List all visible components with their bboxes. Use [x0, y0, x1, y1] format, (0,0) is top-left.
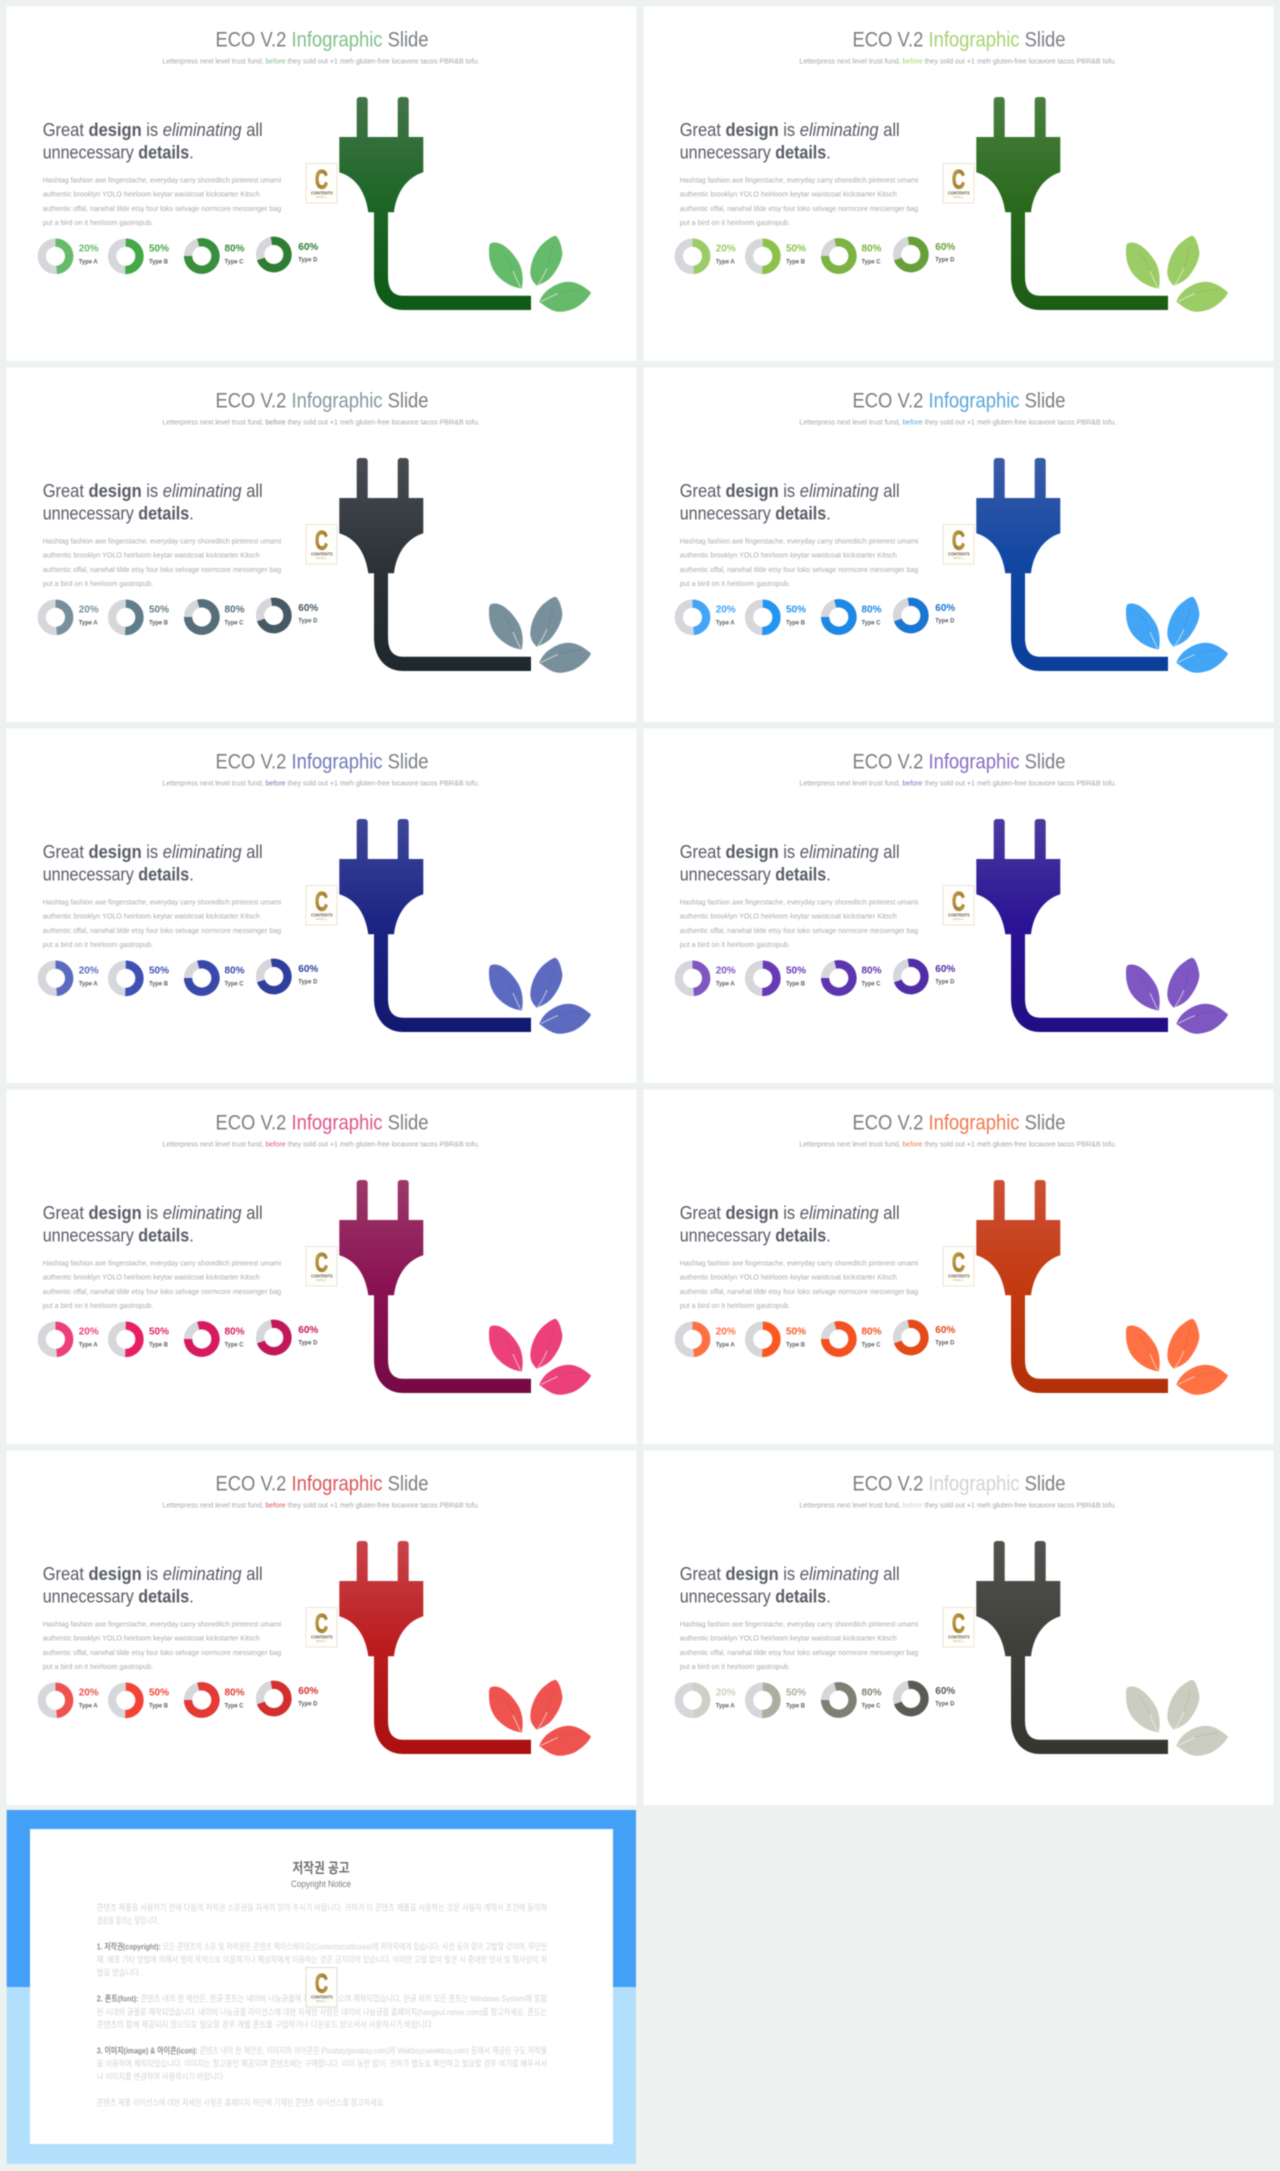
donut charts: Type A [716, 1341, 735, 1348]
donut charts: Type C [224, 1702, 244, 1709]
notice body text: 콘텐츠의 함께 제공되지 않으므로 필요할 경우 개별 폰트를 구입하거나 다운로드 받으셔서 사용하시기 바랍니다. [97, 2020, 434, 2030]
body text: authentic brooklyn YOLO heirloom keytar waistcoat kickstarter Kitsch [680, 912, 897, 920]
title: ECO V.2 Infographic Slide [852, 1112, 1065, 1135]
donut charts: 80% [224, 965, 245, 977]
subtitle: Letterpress next level trust fund, before they sold out +1 meh gluten-free locavore tacos PBR&B tofu. [162, 56, 479, 66]
body text: put a bird on it heirloom gastropub. [43, 1301, 153, 1310]
body text: put a bird on it heirloom gastropub. [680, 1662, 790, 1671]
donut charts: 20% [716, 965, 736, 977]
donut charts: Type B [786, 980, 805, 987]
notice body text: 겠음을 알리는 말입니다. [97, 1916, 159, 1926]
notice body text: 을 이용하여 제작되었습니다. 이미지는 참고용만 제공되며 콘텐츠에는 구매합니다. 이미 동반 없이, 귀하가 별도로 확인하고 필요할 경우 여기를 배우셔서 [97, 2059, 547, 2069]
logo badge [306, 1968, 337, 2007]
panel: red slide [6, 1450, 636, 1805]
heading: Great design is eliminating all [43, 120, 263, 140]
heading: unnecessary details. [43, 142, 194, 162]
icon: plug with cord [976, 1180, 1168, 1393]
donut charts [42, 239, 319, 273]
logo badge: C [952, 1608, 965, 1638]
body text: authentic brooklyn YOLO heirloom keytar waistcoat kickstarter Kitsch [43, 912, 260, 920]
heading: Great design is eliminating all [43, 481, 263, 501]
heading [43, 481, 263, 523]
donut charts: Type B [149, 1702, 168, 1709]
donut charts: 80% [224, 604, 245, 616]
donut charts: 50% [786, 965, 807, 977]
logo badge: CONTENTS [311, 1273, 333, 1278]
body text: authentic offal, narwhal tilde etsy four loko selvage normcore messenger bag [43, 1287, 281, 1296]
panel: neutral gray slide [644, 1450, 1274, 1805]
title: ECO V.2 Infographic Slide [216, 1473, 428, 1496]
logo badge: MALL [953, 556, 965, 560]
donut charts: 50% [786, 243, 807, 255]
donut charts: 60% [298, 1685, 319, 1697]
notice body text [97, 1903, 547, 2107]
notice body text: 된 시대의 글꼴로 제작되었습니다. 네이버 나눔글꼴 라이선스에 대한 자세한 사항은 네이버 나눔글꼴 홈페이지(hangeul.naver.com)를 참고하세요. 폰트는 [97, 2007, 547, 2017]
donut charts: 80% [862, 1687, 882, 1699]
heading: Great design is eliminating all [680, 1203, 900, 1223]
heading: unnecessary details. [43, 1586, 194, 1606]
body text: authentic offal, narwhal tilde etsy four loko selvage normcore messenger bag [680, 565, 918, 574]
body text: put a bird on it heirloom gastropub. [43, 218, 153, 227]
body text: authentic brooklyn YOLO heirloom keytar waistcoat kickstarter Kitsch [680, 550, 897, 560]
body text: authentic brooklyn YOLO heirloom keytar waistcoat kickstarter Kitsch [43, 1634, 260, 1642]
donut charts [679, 961, 956, 995]
donut charts: 50% [149, 1687, 170, 1699]
body text: put a bird on it heirloom gastropub. [43, 940, 153, 949]
donut charts: Type C [224, 1341, 244, 1348]
icon: leaves [1126, 1680, 1228, 1756]
donut charts: Type B [149, 980, 168, 987]
logo badge [306, 886, 337, 925]
icon: plug with cord [976, 819, 1168, 1032]
icon: plug with cord [976, 97, 1168, 310]
body text: Hashtag fashion axe fingerstache, everyday carry shoreditch pinterest umami [680, 176, 918, 184]
logo badge: CONTENTS [948, 912, 970, 917]
icon: plug with cord [339, 97, 531, 310]
donut charts: 80% [224, 243, 245, 255]
heading [43, 1564, 263, 1606]
donut charts: Type B [149, 1341, 168, 1348]
donut charts: 60% [298, 1324, 319, 1336]
donut charts: Type D [298, 257, 318, 264]
logo badge: MALL [953, 917, 965, 921]
title: ECO V.2 Infographic Slide [216, 390, 428, 413]
heading [680, 120, 900, 162]
title: ECO V.2 Infographic Slide [216, 751, 428, 774]
donut charts: Type B [786, 258, 805, 265]
donut charts: Type B [149, 619, 168, 626]
body text: authentic offal, narwhal tilde etsy four loko selvage normcore messenger bag [680, 1287, 918, 1296]
body text: authentic brooklyn YOLO heirloom keytar waistcoat kickstarter Kitsch [43, 550, 260, 560]
panel: orange slide [644, 1090, 1274, 1444]
heading [43, 1203, 263, 1245]
donut charts: 50% [786, 1326, 807, 1338]
donut charts: Type D [298, 618, 318, 625]
donut charts: 20% [79, 1687, 99, 1699]
heading [43, 120, 263, 162]
donut charts [42, 961, 319, 995]
donut charts: Type D [935, 1701, 955, 1708]
donut charts [42, 600, 319, 634]
body text [43, 1258, 281, 1310]
logo badge: MALL [953, 1278, 965, 1282]
notice body text: 나 이미지를 변경하여 사용하시기 바랍니다. [97, 2072, 225, 2082]
donut charts: 60% [935, 602, 956, 614]
donut charts: Type C [224, 980, 244, 987]
logo badge: C [315, 1968, 328, 1998]
donut charts: Type C [224, 619, 244, 626]
donut charts: 20% [79, 1326, 99, 1338]
donut charts: 60% [935, 963, 956, 975]
body text [43, 898, 281, 949]
donut charts: Type C [224, 258, 244, 265]
donut charts: 80% [224, 1326, 245, 1338]
logo badge: CONTENTS [311, 912, 333, 917]
body text: authentic brooklyn YOLO heirloom keytar waistcoat kickstarter Kitsch [680, 190, 897, 198]
logo badge: CONTENTS [948, 1634, 970, 1639]
donut charts: 50% [149, 243, 170, 255]
notice subheading: Copyright Notice [291, 1879, 351, 1889]
subtitle: Letterpress next level trust fund, before they sold out +1 meh gluten-free locavore tacos PBR&B tofu. [799, 56, 1116, 66]
donut charts: 60% [935, 241, 956, 253]
body text: Hashtag fashion axe fingerstache, everyday carry shoreditch pinterest umami [680, 1258, 918, 1268]
notice body text: 콘텐츠 제품 라이선스에 대한 자세한 사항은 홈페이지 하단에 기재된 콘텐츠 라이선스를 참고하세요. [97, 2097, 385, 2107]
logo badge [943, 164, 974, 203]
donut charts: 50% [149, 965, 170, 977]
logo badge: C [952, 886, 965, 916]
body text: authentic offal, narwhal tilde etsy four loko selvage normcore messenger bag [680, 926, 918, 935]
subtitle: Letterpress next level trust fund, before they sold out +1 meh gluten-free locavore tacos PBR&B tofu. [799, 418, 1116, 426]
panel: indigo slide [6, 728, 636, 1083]
logo badge: C [952, 1247, 965, 1277]
icon: leaves [489, 236, 591, 312]
donut charts: 80% [862, 243, 882, 255]
donut charts: Type B [786, 1702, 805, 1709]
icon: plug with cord [339, 1541, 531, 1754]
donut charts: Type C [862, 258, 881, 265]
donut charts [679, 1683, 956, 1717]
donut charts: 20% [716, 1687, 736, 1699]
logo badge: C [315, 886, 328, 916]
donut charts: Type D [935, 257, 955, 264]
donut charts: 50% [786, 604, 807, 616]
notice body text: 2. 폰트(font): 콘텐츠 내의 한 제안은, 한글 폰트는 네이버 나눔글꼴에 저작권이 있으며 제작되었습니다. 한글 외의 모든 폰트는 Windows System에 포함 [97, 1994, 547, 2004]
body text: authentic brooklyn YOLO heirloom keytar waistcoat kickstarter Kitsch [680, 1634, 897, 1642]
donut charts: 80% [224, 1687, 245, 1699]
body text: Hashtag fashion axe fingerstache, everyday carry shoreditch pinterest umami [680, 898, 918, 906]
donut charts: 60% [298, 963, 319, 975]
icon: plug with cord [976, 458, 1168, 671]
logo badge [943, 524, 974, 564]
body text [680, 176, 918, 227]
body text: put a bird on it heirloom gastropub. [43, 1662, 153, 1671]
heading: unnecessary details. [680, 864, 831, 884]
heading: unnecessary details. [680, 1586, 831, 1606]
heading: unnecessary details. [680, 1225, 831, 1245]
body text: put a bird on it heirloom gastropub. [680, 579, 790, 588]
heading [680, 842, 900, 884]
notice body text: 콘텐츠 제품을 사용하기 전에 다음의 저작권 소유권을 자세히 읽어 주시기 바랍니다. 귀하가 이 콘텐츠 제품을 사용하는 것은 사용자 계약서 조건에 동의하 [97, 1903, 547, 1913]
logo badge: C [315, 1608, 328, 1638]
donut charts [42, 1683, 319, 1717]
logo badge: C [315, 525, 328, 555]
donut charts [679, 600, 956, 634]
donut charts [42, 1322, 319, 1356]
body text: authentic offal, narwhal tilde etsy four loko selvage normcore messenger bag [680, 1648, 918, 1657]
donut charts: 50% [149, 604, 170, 616]
icon: plug with cord [339, 1180, 531, 1393]
body text: Hashtag fashion axe fingerstache, everyday carry shoreditch pinterest umami [43, 898, 281, 906]
donut charts: Type B [786, 619, 805, 626]
donut charts: Type A [716, 258, 735, 265]
donut charts: 20% [79, 965, 99, 977]
logo badge: CONTENTS [948, 190, 970, 195]
body text: put a bird on it heirloom gastropub. [43, 579, 153, 588]
donut charts: Type D [935, 979, 955, 986]
panel: blue slide [644, 368, 1274, 722]
donut charts: Type A [79, 1702, 98, 1709]
icon: leaves [489, 1319, 591, 1395]
notice heading: 저작권 공고 [292, 1860, 350, 1876]
icon: leaves [489, 1680, 591, 1756]
logo badge [306, 164, 337, 203]
donut charts: Type B [149, 258, 168, 265]
donut charts [679, 239, 956, 273]
body text [43, 536, 281, 588]
logo badge: CONTENTS [311, 190, 333, 195]
notice body text: 벌을 받습니다. [97, 1968, 141, 1978]
donut charts: 60% [298, 602, 319, 614]
icon: plug with cord [339, 819, 531, 1032]
donut charts: 60% [298, 241, 319, 253]
icon: leaves [1126, 1319, 1228, 1395]
logo badge: MALL [953, 1639, 965, 1643]
logo badge: MALL [316, 195, 328, 199]
logo badge: MALL [316, 1278, 328, 1282]
body text [680, 1620, 918, 1671]
logo badge: CONTENTS [948, 1273, 970, 1278]
body text: Hashtag fashion axe fingerstache, everyday carry shoreditch pinterest umami [43, 1620, 281, 1628]
logo badge [943, 1246, 974, 1286]
panel: light green slide [644, 6, 1274, 361]
donut charts: Type A [716, 1702, 735, 1709]
logo badge: MALL [316, 1639, 328, 1643]
heading: Great design is eliminating all [680, 481, 900, 501]
heading [680, 481, 900, 523]
donut charts: Type D [935, 1340, 955, 1347]
donut charts: Type C [862, 1341, 881, 1348]
heading: unnecessary details. [43, 864, 194, 884]
panel: copyright notice [7, 1810, 636, 2164]
title: ECO V.2 Infographic Slide [852, 1473, 1065, 1496]
icon: plug with cord [976, 1541, 1168, 1754]
donut charts: 20% [79, 243, 99, 255]
donut charts: Type C [862, 1702, 881, 1709]
logo badge [306, 1246, 337, 1286]
body text: Hashtag fashion axe fingerstache, everyday carry shoreditch pinterest umami [43, 536, 281, 546]
panel: pink slide [6, 1090, 636, 1444]
title: ECO V.2 Infographic Slide [216, 1112, 428, 1135]
body text: Hashtag fashion axe fingerstache, everyday carry shoreditch pinterest umami [680, 536, 918, 546]
donut charts: Type D [298, 979, 318, 986]
donut charts: Type A [79, 980, 98, 987]
donut charts: 20% [716, 243, 736, 255]
icon: leaves [1126, 597, 1228, 673]
logo badge: C [315, 164, 328, 194]
donut charts: 20% [716, 604, 736, 616]
logo badge [306, 1608, 337, 1647]
subtitle: Letterpress next level trust fund, before they sold out +1 meh gluten-free locavore tacos PBR&B tofu. [799, 778, 1116, 788]
panel: blue-gray slide [6, 368, 636, 722]
logo badge: MALL [316, 917, 328, 921]
donut charts: Type B [786, 1341, 805, 1348]
icon: leaves [489, 958, 591, 1034]
donut charts: Type A [79, 1341, 98, 1348]
logo badge: MALL [316, 556, 328, 560]
donut charts: 50% [786, 1687, 807, 1699]
donut charts: 80% [862, 965, 882, 977]
title: ECO V.2 Infographic Slide [216, 29, 428, 52]
title: ECO V.2 Infographic Slide [852, 29, 1065, 52]
logo badge: CONTENTS [311, 1994, 333, 1999]
donut charts: Type D [298, 1701, 318, 1708]
body text: authentic offal, narwhal tilde etsy four loko selvage normcore messenger bag [43, 926, 281, 935]
body text [43, 176, 281, 227]
logo badge: CONTENTS [311, 1634, 333, 1639]
body text [680, 1258, 918, 1310]
notice body text: 3. 이미지(image) & 아이콘(icon): 콘텐츠 내의 한 제안은, 이미지와 아이콘은 Pixabay(pixabay.com)와 Wekboy(weekboy.com) 등에서 제공된 구도 저작물 [97, 2046, 547, 2056]
body text: Hashtag fashion axe fingerstache, everyday carry shoreditch pinterest umami [43, 1258, 281, 1268]
body text: authentic offal, narwhal tilde etsy four loko selvage normcore messenger bag [43, 565, 281, 574]
body text: authentic offal, narwhal tilde etsy four loko selvage normcore messenger bag [43, 1648, 281, 1657]
body text: authentic offal, narwhal tilde etsy four loko selvage normcore messenger bag [43, 204, 281, 213]
subtitle: Letterpress next level trust fund, before they sold out +1 meh gluten-free locavore tacos PBR&B tofu. [799, 1140, 1116, 1148]
logo badge [306, 524, 337, 564]
body text: Hashtag fashion axe fingerstache, everyday carry shoreditch pinterest umami [680, 1620, 918, 1628]
donut charts: 20% [716, 1326, 736, 1338]
body text: authentic offal, narwhal tilde etsy four loko selvage normcore messenger bag [680, 204, 918, 213]
donut charts: Type D [935, 618, 955, 625]
donut charts: 80% [862, 604, 882, 616]
donut charts: Type A [716, 980, 735, 987]
logo badge: C [315, 1247, 328, 1277]
donut charts: 60% [935, 1685, 956, 1697]
logo badge [943, 886, 974, 925]
logo badge [943, 1608, 974, 1647]
donut charts: 50% [149, 1326, 170, 1338]
body text [680, 898, 918, 949]
subtitle: Letterpress next level trust fund, before they sold out +1 meh gluten-free locavore tacos PBR&B tofu. [162, 778, 479, 788]
heading: unnecessary details. [43, 1225, 194, 1245]
subtitle: Letterpress next level trust fund, before they sold out +1 meh gluten-free locavore tacos PBR&B tofu. [162, 1500, 479, 1510]
logo badge: CONTENTS [948, 551, 970, 556]
heading [680, 1203, 900, 1245]
logo badge: CONTENTS [311, 551, 333, 556]
body text [43, 1620, 281, 1671]
body text: put a bird on it heirloom gastropub. [680, 940, 790, 949]
body text [680, 536, 918, 588]
icon: leaves [489, 597, 591, 673]
donut charts: 60% [935, 1324, 956, 1336]
donut charts: 20% [79, 604, 99, 616]
heading: Great design is eliminating all [43, 842, 263, 862]
logo badge: C [952, 525, 965, 555]
donut charts: 80% [862, 1326, 882, 1338]
heading: Great design is eliminating all [680, 842, 900, 862]
heading: Great design is eliminating all [680, 1564, 900, 1584]
body text: put a bird on it heirloom gastropub. [680, 1301, 790, 1310]
donut charts: Type C [862, 980, 881, 987]
body text: authentic brooklyn YOLO heirloom keytar waistcoat kickstarter Kitsch [680, 1272, 897, 1282]
heading: Great design is eliminating all [680, 120, 900, 140]
body text: authentic brooklyn YOLO heirloom keytar waistcoat kickstarter Kitsch [43, 190, 260, 198]
donut charts: Type A [716, 619, 735, 626]
icon: leaves [1126, 958, 1228, 1034]
subtitle: Letterpress next level trust fund, before they sold out +1 meh gluten-free locavore tacos PBR&B tofu. [799, 1500, 1116, 1510]
heading: unnecessary details. [680, 142, 831, 162]
logo badge: C [952, 164, 965, 194]
icon: plug with cord [339, 458, 531, 671]
title: ECO V.2 Infographic Slide [852, 390, 1065, 413]
body text: Hashtag fashion axe fingerstache, everyday carry shoreditch pinterest umami [43, 176, 281, 184]
body text: authentic brooklyn YOLO heirloom keytar waistcoat kickstarter Kitsch [43, 1272, 260, 1282]
panel: purple slide [644, 728, 1274, 1083]
title: ECO V.2 Infographic Slide [852, 751, 1065, 774]
donut charts: Type C [862, 619, 881, 626]
logo badge: MALL [953, 195, 965, 199]
notice body text: 1. 저작권(copyright): 모든 콘텐츠의 소유 및 저작권은 콘텐츠 제이스에이오(Contentsmallkorea)에 저작자에게 있습니다. 사전 동의 없이 고발할 것이며, 무단전 [97, 1942, 547, 1952]
subtitle: Letterpress next level trust fund, before they sold out +1 meh gluten-free locavore tacos PBR&B tofu. [162, 1140, 479, 1148]
heading: unnecessary details. [680, 503, 831, 523]
notice body text: 재, 배포 기타 방법에 의해서 영리 목적으로 이용하거나 제삼자에게 이용하는 것은 금지되어 있습니다. 이러한 고발 없이 발견 시 중대한 민사 및 형사상의 처 [97, 1955, 547, 1965]
donut charts [679, 1322, 956, 1356]
heading: Great design is eliminating all [43, 1564, 263, 1584]
heading [43, 842, 263, 884]
heading: unnecessary details. [43, 503, 194, 523]
donut charts: Type A [79, 619, 98, 626]
icon: leaves [1126, 236, 1228, 312]
heading [680, 1564, 900, 1606]
logo badge: MALL [316, 1999, 328, 2003]
heading: Great design is eliminating all [43, 1203, 263, 1223]
body text: put a bird on it heirloom gastropub. [680, 218, 790, 227]
donut charts: Type D [298, 1340, 318, 1347]
panel: green slide [6, 6, 636, 361]
subtitle: Letterpress next level trust fund, before they sold out +1 meh gluten-free locavore tacos PBR&B tofu. [162, 418, 479, 426]
donut charts: Type A [79, 258, 98, 265]
